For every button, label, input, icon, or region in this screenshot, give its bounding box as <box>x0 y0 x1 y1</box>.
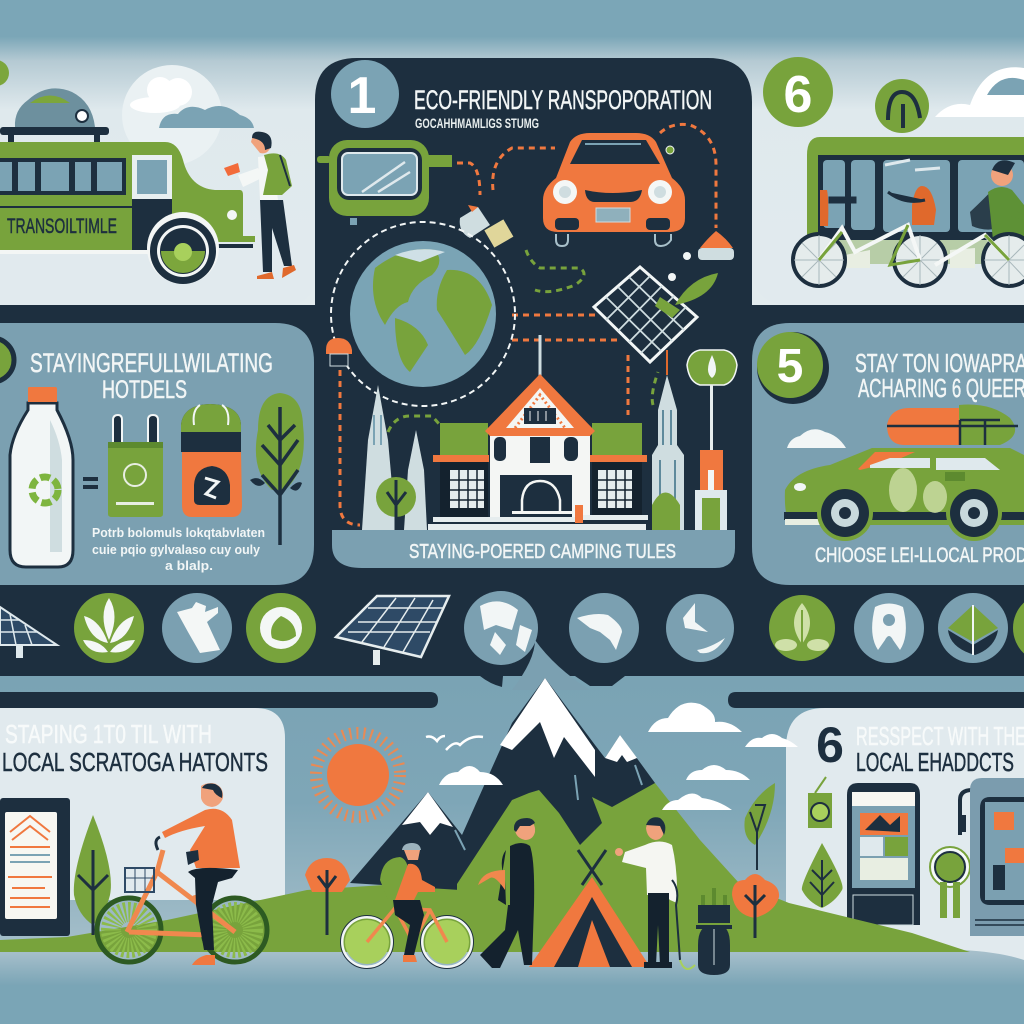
panel: left bottle <box>0 323 314 585</box>
heading <box>2 719 268 777</box>
icon: cyclist with backpack <box>340 843 474 968</box>
icon: bottle circle <box>162 593 232 663</box>
connector: orbit around globe <box>331 222 515 406</box>
panel: right car <box>752 323 1024 585</box>
icon: hiker in black <box>478 818 535 968</box>
icon: green sign post <box>930 847 970 918</box>
icon: bus with bicycles <box>793 137 1024 286</box>
heading <box>856 721 1024 777</box>
icon: person in white <box>615 817 677 968</box>
icon: globe bubble <box>464 591 538 665</box>
central diagram <box>317 60 737 568</box>
heading: ECO-FRIENDLY RANSPOPORATION <box>414 85 712 115</box>
heading <box>855 348 1024 403</box>
icon: tree <box>250 393 304 545</box>
icon: bird circle <box>666 594 734 662</box>
heading <box>30 348 273 404</box>
badge: 1 <box>331 60 399 128</box>
panel: top left transit <box>0 60 315 305</box>
caption bar: STAYING-POERED CAMPING TULES <box>409 541 676 563</box>
icon: tag <box>808 777 832 828</box>
icon: birds <box>426 736 483 750</box>
icon: globe <box>350 241 496 387</box>
icon: arch sign <box>875 79 929 133</box>
icon: teal bubble into sky <box>512 640 590 690</box>
badge: 5 <box>757 332 829 404</box>
icon: cloud <box>787 429 846 448</box>
icon: small plug left <box>460 205 513 248</box>
icon: orange backpack <box>181 404 242 517</box>
icon: water bottle <box>10 387 73 567</box>
icon: solar panel left <box>0 607 57 658</box>
heading: STAPING 1T0 TIL WITH <box>5 719 212 749</box>
icon: orange tent <box>529 850 650 967</box>
icon: green reusable bag <box>108 415 163 517</box>
icon: ev charger <box>958 778 1024 936</box>
icon: towers and tree left <box>362 385 427 534</box>
icon: clouds <box>439 703 798 810</box>
icon: recycling circle <box>246 593 316 663</box>
icon: camp backpack <box>672 880 732 975</box>
icon: lantern <box>326 338 352 366</box>
icon: green leaf circle <box>938 593 1008 663</box>
icon: green car with roof box <box>784 405 1024 541</box>
heading: STAYINGREFULLWILATING <box>30 348 273 378</box>
text block <box>92 525 265 573</box>
icon: leaf circle <box>74 593 144 663</box>
panel: dark central network <box>0 58 1024 708</box>
icon: cyclist in orange <box>97 783 267 965</box>
icon: map circle <box>569 593 639 663</box>
icon: shield circle <box>854 593 924 663</box>
icon: solar panel centre <box>336 596 449 665</box>
icon: green tip <box>0 60 9 86</box>
icon: cloud <box>935 67 1024 117</box>
icon: equals <box>83 477 98 489</box>
icon row <box>0 591 1024 690</box>
panel: bottom right local products <box>786 708 1024 960</box>
icon: bus: TRANSOILTIMLE <box>7 215 117 238</box>
badge: 1: 1 <box>348 67 376 125</box>
text block: Potrb bolomuls lokqtabvlaten <box>92 525 265 540</box>
text block: cuie pqio gylvalaso cuy ouly <box>92 542 261 557</box>
icon: orange car <box>543 133 685 246</box>
badge: 6: 6 <box>784 66 812 124</box>
icon: kiosk phone <box>847 783 920 925</box>
icon: clouds <box>122 65 254 165</box>
scene: mountains and campsite <box>0 678 970 975</box>
icon: large mountain <box>350 678 760 920</box>
text block: a blalp. <box>165 558 213 573</box>
icon: small plug right <box>683 231 734 260</box>
badge: 6: 6 <box>816 717 844 773</box>
icon: sprout circle <box>769 595 835 661</box>
heading: LOCAL SCRATOGA HATONTS <box>2 747 268 777</box>
caption bar <box>332 530 735 568</box>
icon: tower and sign right <box>652 350 737 532</box>
icon: tree <box>802 843 843 908</box>
icon: green screen device <box>317 140 452 225</box>
connector: dashed routes <box>340 124 716 525</box>
subheading: GOCAHHMAMLIGS STUMG <box>415 115 539 131</box>
icon: bus <box>0 88 255 284</box>
panel: top right bus and bikes <box>752 57 1024 305</box>
badge: 6 <box>763 57 833 127</box>
icon: edge circle <box>1013 593 1024 663</box>
heading: HOTDELS <box>102 376 187 404</box>
icon: traveller with backpack <box>224 132 296 279</box>
icon: solar panel <box>594 267 697 362</box>
panel: bottom left local <box>0 708 285 936</box>
icon: info board <box>0 798 70 936</box>
icon: green badge edge <box>0 338 14 382</box>
icon: central station building <box>428 335 648 530</box>
badge: 5: 5 <box>777 340 803 393</box>
icon: leaves <box>655 273 718 318</box>
icon: trees <box>74 783 779 938</box>
icon: sun <box>316 733 400 817</box>
hill <box>0 860 970 952</box>
